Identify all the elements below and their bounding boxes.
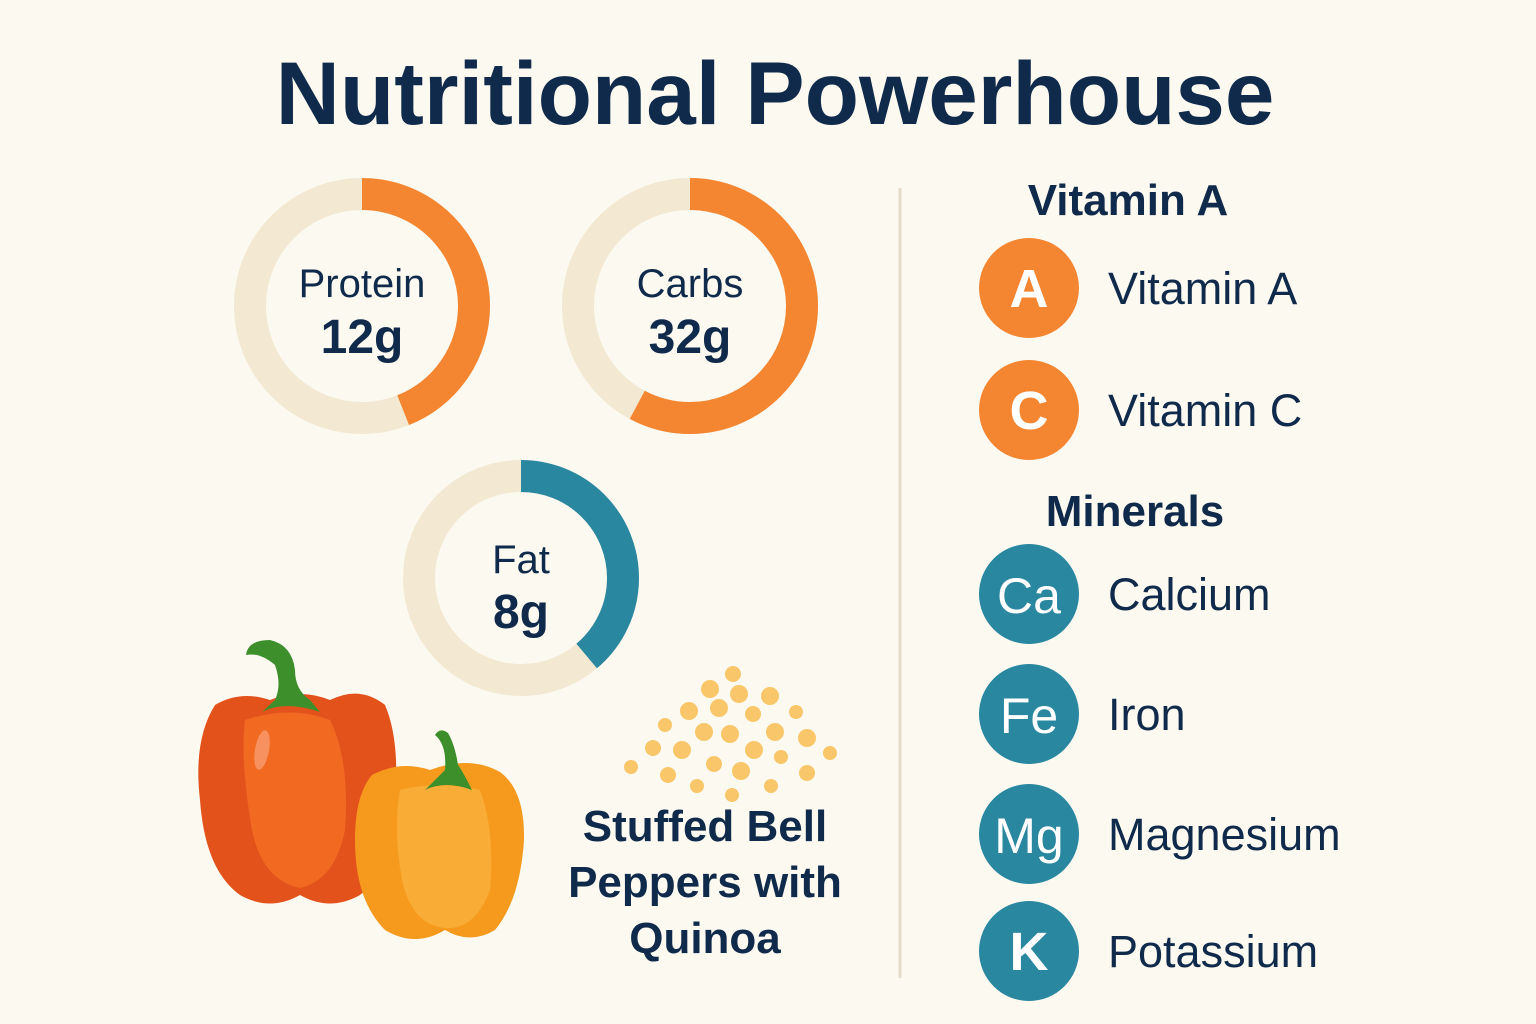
donut: protein: Protein: [299, 262, 425, 306]
dish name: Stuffed Bell: [583, 802, 827, 851]
vitamin C: [979, 360, 1302, 460]
potassium: K: [1010, 922, 1048, 982]
icon: red bell pepper: [198, 640, 396, 904]
calcium: Ca: [997, 568, 1061, 624]
iron: Iron: [1108, 689, 1186, 740]
dish name: Peppers with: [568, 858, 842, 907]
magnesium: Mg: [994, 808, 1064, 864]
magnesium: [979, 784, 1341, 884]
vitamin A: [979, 238, 1297, 338]
dish name: Quinoa: [629, 914, 781, 963]
dish name: [568, 802, 842, 963]
icon: yellow bell pepper: [355, 730, 524, 939]
donut: fat: Fat: [492, 538, 550, 582]
donut: protein: [250, 194, 474, 418]
vitamin A: Vitamin A: [1108, 263, 1297, 314]
iron: Fe: [1000, 688, 1058, 744]
donut: fat: [419, 476, 623, 680]
donut: carbs: 32g: [649, 311, 731, 364]
magnesium: Magnesium: [1108, 809, 1341, 860]
donut: fat: 8g: [493, 586, 549, 639]
heading: vitamins: Vitamin A: [1028, 176, 1228, 225]
potassium: [979, 901, 1318, 1001]
potassium: Potassium: [1108, 926, 1318, 977]
vitamin C: C: [1010, 381, 1048, 441]
donut: carbs: Carbs: [637, 262, 743, 306]
vitamin A: A: [1010, 259, 1048, 319]
iron: [979, 664, 1186, 764]
calcium: [979, 544, 1271, 644]
vitamin C: Vitamin C: [1108, 385, 1302, 436]
icon: quinoa dots: [624, 666, 837, 802]
donut: protein: 12g: [321, 311, 403, 364]
heading: minerals: Minerals: [1046, 487, 1224, 536]
title: Nutritional Powerhouse: [276, 43, 1274, 143]
calcium: Calcium: [1108, 569, 1271, 620]
donut: carbs: [578, 194, 802, 418]
